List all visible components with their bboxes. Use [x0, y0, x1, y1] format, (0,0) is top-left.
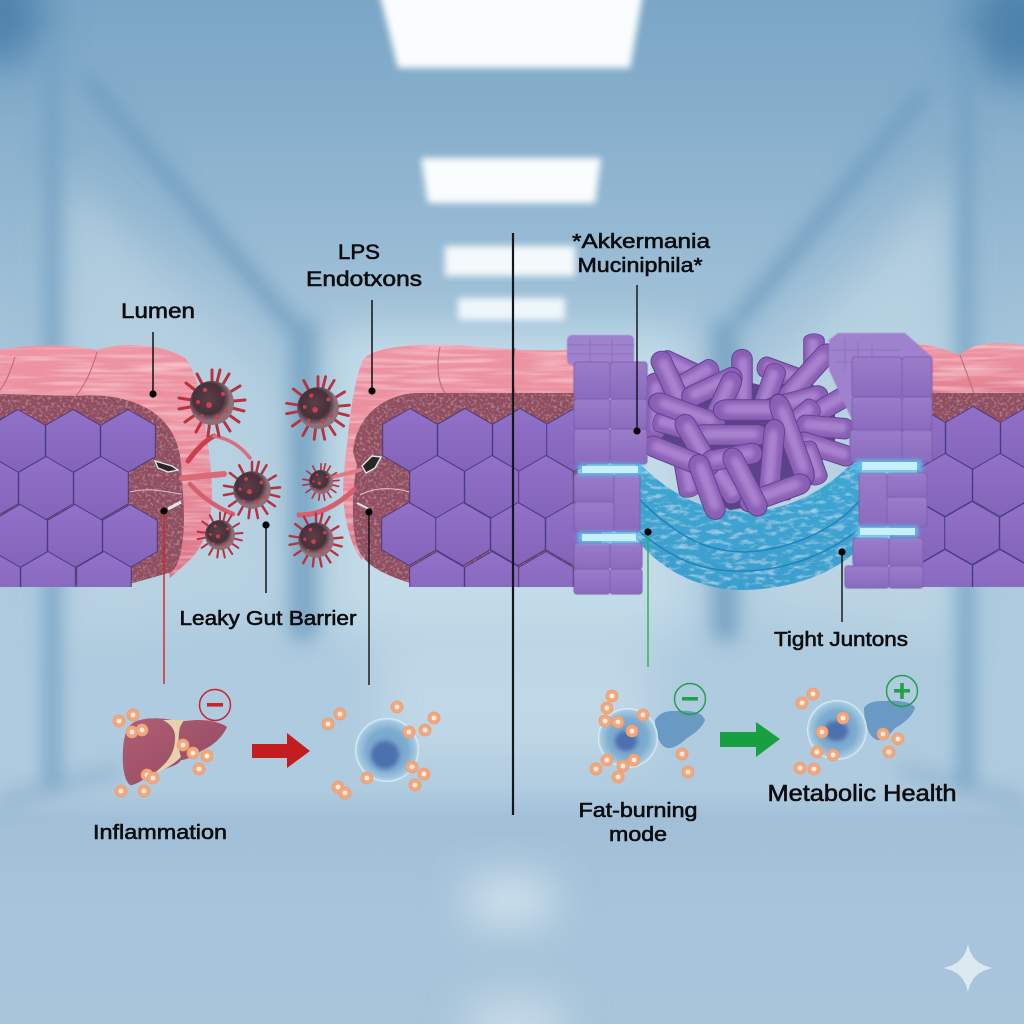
- leader to immune cell: [365, 508, 373, 685]
- label: LPS Endotxons: LPS: [338, 241, 380, 264]
- brown cross section, left: [0, 394, 184, 587]
- icon: red minus badge: [200, 690, 230, 720]
- LPS endotoxin viruses: [179, 370, 349, 566]
- brown band, far right: [925, 393, 1024, 430]
- junction gaps, left: [155, 461, 178, 472]
- label: Lumen: Lumen: [121, 300, 195, 323]
- label: Leaky Gut Barrier: Leaky Gut Barrier: [180, 607, 357, 630]
- label: Fat-burning mode: mode: [609, 823, 667, 846]
- icon: green minus badge: [674, 684, 706, 714]
- pink villi surface, far right: [905, 343, 1024, 400]
- inflammation particles, liver: [113, 709, 213, 797]
- purple tight-junction block column, left: [567, 335, 647, 594]
- label: Fat-burning mode: [578, 799, 698, 846]
- label: Tight Juntons: [774, 548, 908, 651]
- brown cross section, centre: [353, 393, 578, 587]
- junction gaps, centre: [362, 456, 381, 473]
- particles, healthy: [794, 688, 904, 775]
- label: Tight Juntons: Tight Juntons: [774, 629, 908, 651]
- panel: healthy tissue, far right: [891, 343, 1024, 612]
- panel: leaky gut barrier tissue, left: [0, 345, 250, 614]
- glowing junctions, right: [856, 460, 922, 537]
- icon: stressed immune cell: [322, 701, 440, 799]
- label: Metabolic Health: Metabolic Health: [768, 780, 956, 806]
- icon: healthy cell and liver: [794, 688, 915, 775]
- glowing junctions, left: [578, 464, 642, 543]
- inflammation particles, cell: [322, 701, 440, 799]
- label: LPS Endotxons: [306, 241, 422, 395]
- epithelial hexagons, centre: [381, 408, 601, 587]
- pink villi surface, centre: [343, 345, 575, 560]
- epithelial hexagons, far right: [890, 406, 1024, 587]
- purple tight-junction block column, right: [829, 333, 932, 588]
- icon: green plus badge: [886, 676, 918, 706]
- arrow: green: [720, 722, 780, 757]
- icon: fat-burning cell and liver: [590, 690, 705, 783]
- central divider: [512, 233, 514, 815]
- dark gaps behind rods: [660, 370, 835, 510]
- label: Leaky Gut Barrier: [180, 521, 357, 630]
- Akkermania bacteria cluster: [654, 340, 846, 510]
- label: Akkermania Muciniphila: [572, 230, 711, 435]
- label: LPS Endotxons: Endotxons: [306, 268, 422, 291]
- mucus layer: [636, 452, 862, 590]
- escaping tendrils, centre: [299, 470, 360, 515]
- pink villi surface, left: [0, 345, 212, 578]
- label: Fat-burning mode: Fat-burning: [578, 799, 698, 822]
- icon: inflamed liver: [113, 709, 227, 797]
- epithelial hexagons, left: [0, 409, 158, 587]
- leader to fat-burning: [644, 528, 652, 667]
- ceiling lights: [378, 0, 644, 320]
- panel: leaky gut barrier tissue, centre: [299, 345, 601, 614]
- label: Lumen: [121, 300, 195, 398]
- escaping tendrils, left: [182, 436, 250, 514]
- label: Akkermania Muciniphila: *Akkermania: [572, 230, 711, 253]
- leader to inflammation: [160, 507, 168, 684]
- arrow: red: [252, 733, 310, 768]
- label: Inflammation: Inflammation: [93, 821, 227, 844]
- icon: sparkle watermark: [943, 944, 993, 992]
- particles, fat-burning: [590, 690, 694, 783]
- label: Akkermania Muciniphila: Muciniphila*: [578, 254, 703, 277]
